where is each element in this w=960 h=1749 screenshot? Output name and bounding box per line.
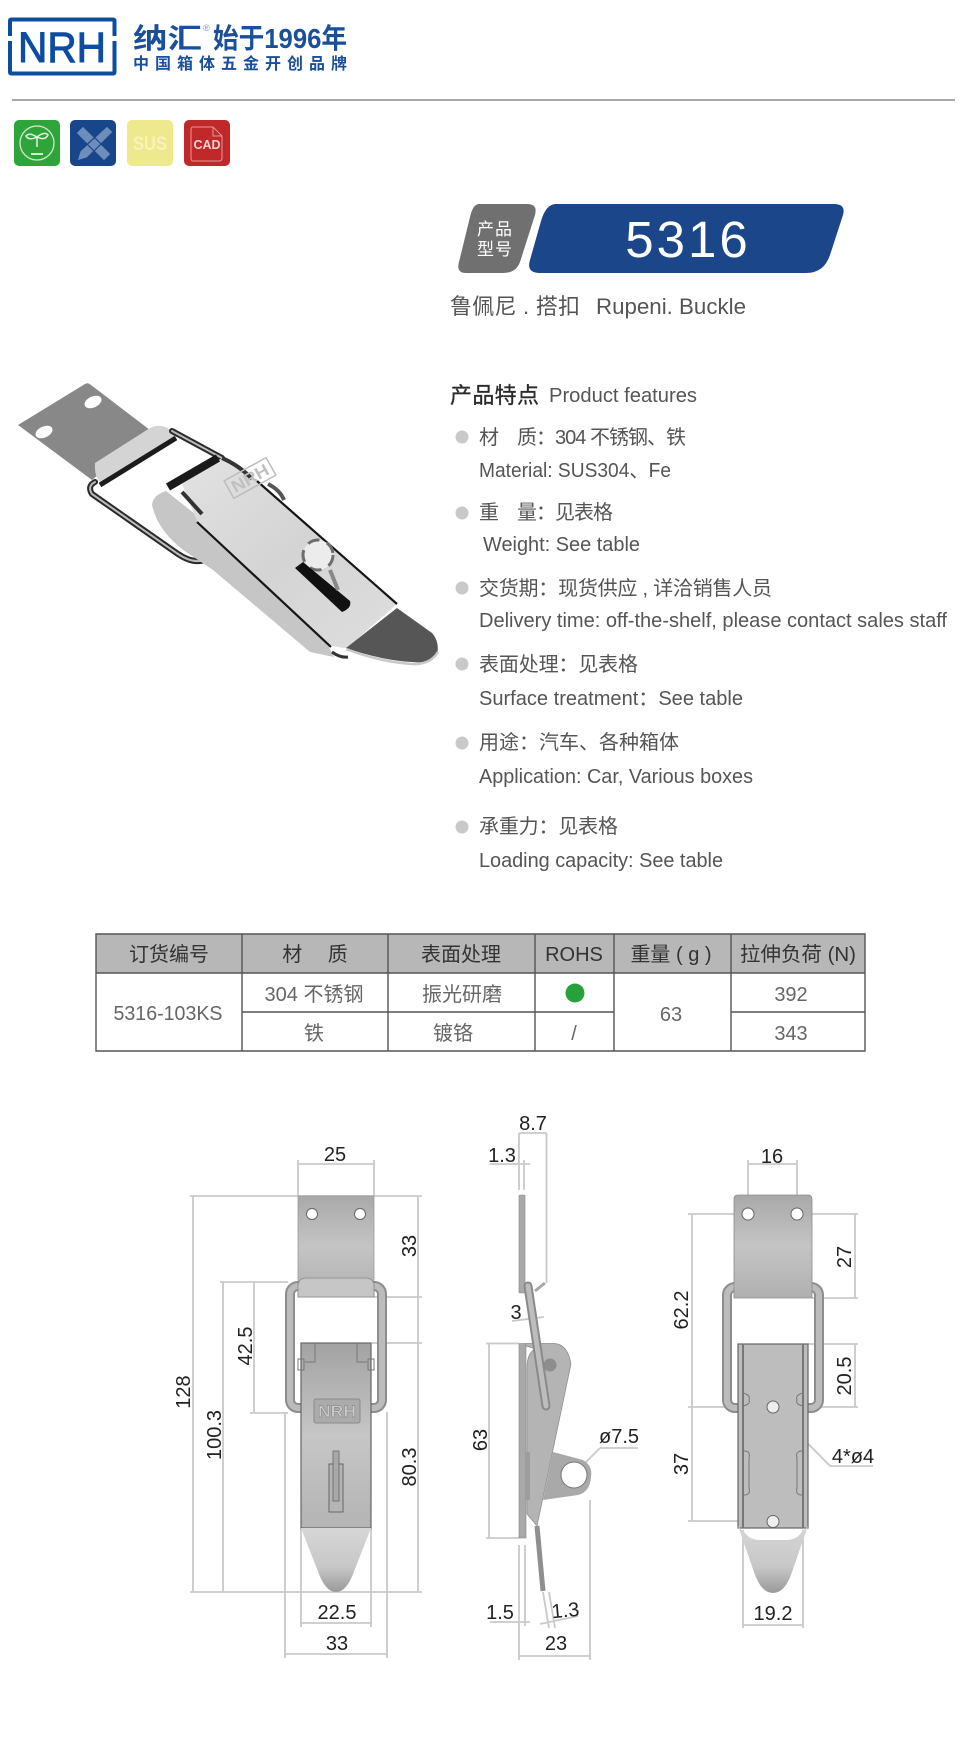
table header: 材 质 <box>282 943 348 966</box>
front view labels: 100.3 <box>204 1410 226 1460</box>
latch top face <box>182 458 397 648</box>
front view labels: 25 <box>324 1144 346 1166</box>
front view labels: 128 <box>173 1375 195 1409</box>
back view labels: 16 <box>761 1146 783 1168</box>
founded since 1996: 始于1996年 <box>213 23 347 54</box>
feature: surface: Surface treatment：See table <box>479 688 743 710</box>
table header: 表面处理 <box>421 943 501 966</box>
product name: 鲁佩尼 . 搭扣 <box>450 294 580 319</box>
label tab: 型号 <box>477 240 513 259</box>
front view labels: 42.5 <box>235 1327 257 1365</box>
icon: eco green <box>14 120 60 166</box>
hasp slot <box>329 1451 343 1512</box>
table body: / <box>571 1023 577 1045</box>
feature: surface <box>456 653 743 710</box>
nose <box>301 1528 371 1592</box>
back view labels: 19.2 <box>754 1603 792 1625</box>
brand slogan: 纳汇 <box>133 23 202 54</box>
back view labels: 20.5 <box>834 1357 856 1395</box>
side view labels: ø7.5 <box>599 1426 639 1448</box>
side view labels <box>470 1113 639 1655</box>
front view labels: 22.5 <box>318 1602 356 1624</box>
front view labels: 80.3 <box>399 1448 421 1486</box>
product photo: latch <box>18 383 438 664</box>
table body: 振光研磨 <box>422 983 502 1006</box>
back view labels: 4*ø4 <box>832 1446 874 1468</box>
brand subtitle: 中国箱体五金开创品牌 <box>133 54 347 73</box>
table header <box>96 934 865 973</box>
back plate <box>734 1195 812 1298</box>
feature: loading: Loading capacity: See table <box>479 850 723 872</box>
front view dimension lines <box>190 1160 422 1658</box>
embossed NRH badge: NRH <box>318 1402 356 1421</box>
side body <box>526 1344 571 1526</box>
table body: 304 不锈钢 <box>265 983 363 1006</box>
feature: weight <box>456 501 640 556</box>
side view labels: 1.3 <box>488 1145 516 1167</box>
certification icons <box>14 120 230 166</box>
slot and ring <box>295 540 350 612</box>
front view labels: 33 <box>326 1633 348 1655</box>
side nose <box>537 1526 543 1591</box>
latch side cylinder <box>152 491 334 657</box>
table header: ROHS <box>545 944 603 966</box>
feature: material: 材 质：304 不锈钢、铁 <box>479 426 686 449</box>
product name <box>450 294 746 319</box>
spec table <box>96 934 865 1051</box>
feature: surface: 表面处理：见表格 <box>479 653 638 676</box>
latch body <box>298 1343 374 1528</box>
drawing: back view <box>671 1146 874 1628</box>
feature: weight: 重 量：见表格 <box>479 501 613 524</box>
back view labels <box>671 1146 874 1625</box>
features heading: Product features <box>549 385 697 407</box>
wire loop <box>90 431 222 561</box>
table body: 63 <box>660 1004 682 1026</box>
feature: loading: 承重力：见表格 <box>479 815 618 838</box>
rolled band <box>298 1278 374 1297</box>
base strip <box>519 1344 526 1538</box>
logo: NRH box: NRH <box>18 24 106 72</box>
feature: application: 用途：汽车、各种箱体 <box>479 731 679 754</box>
table body: 镀铬 <box>433 1022 473 1045</box>
table body: 343 <box>774 1023 808 1045</box>
drawing: front view <box>173 1144 422 1658</box>
side view dimension lines <box>486 1133 638 1660</box>
product name: Rupeni. Buckle <box>596 294 746 319</box>
lug with hole <box>543 1452 591 1500</box>
feature: delivery <box>456 577 947 632</box>
wire loop <box>290 1286 382 1408</box>
feature: material: Material: SUS304、Fe <box>479 460 671 482</box>
icon: SUS <box>127 120 173 166</box>
nose tip <box>346 608 438 662</box>
back view dimension lines <box>688 1160 873 1628</box>
table grid <box>96 934 865 1051</box>
drawing: side view <box>470 1113 639 1660</box>
small tail <box>535 1283 545 1291</box>
feature: delivery: 交货期：现货供应 , 详洽销售人员 <box>479 577 772 600</box>
label tab: 产品 <box>477 220 513 239</box>
wire side <box>528 1286 546 1406</box>
features heading: 产品特点 <box>450 383 539 408</box>
embossed NRH badge <box>314 1399 360 1423</box>
base plate <box>18 383 150 480</box>
embossed NRH badge: NRH <box>228 460 272 496</box>
feature: application: Application: Car, Various boxes <box>479 766 753 788</box>
side view labels: 63 <box>470 1429 492 1451</box>
table body <box>114 983 808 1045</box>
icon: SUS: SUS <box>133 134 167 155</box>
features heading <box>450 383 697 408</box>
number bar: 5316 <box>625 211 751 268</box>
front view labels <box>173 1144 421 1655</box>
back latch body <box>738 1344 808 1528</box>
registered mark: ® <box>203 23 210 33</box>
back view labels: 27 <box>834 1246 856 1268</box>
table body: 392 <box>774 984 808 1006</box>
side view labels: 1.3 <box>551 1599 580 1623</box>
back view labels: 37 <box>671 1453 693 1475</box>
side view labels: 3 <box>510 1302 522 1324</box>
feature: application <box>456 731 753 788</box>
icon: ruler and pencil <box>70 120 116 166</box>
table header: 重量 ( g ) <box>630 943 712 966</box>
feature: loading <box>456 815 723 872</box>
ROHS compliant dot <box>566 984 584 1002</box>
table body: 铁 <box>304 1022 324 1045</box>
side view labels: 8.7 <box>519 1113 547 1135</box>
product features <box>450 383 947 872</box>
side view labels: 1.5 <box>486 1602 514 1624</box>
back wire loop <box>727 1287 819 1408</box>
front view labels: 33 <box>399 1235 421 1257</box>
icon: CAD: CAD <box>193 138 221 152</box>
brand logo header <box>10 20 347 74</box>
embossed NRH badge <box>224 458 276 498</box>
back view labels: 62.2 <box>671 1291 693 1329</box>
rolled band <box>95 426 176 484</box>
feature: delivery: Delivery time: off-the-shelf, please contact sales staff <box>479 610 947 632</box>
mounting plate <box>298 1196 374 1297</box>
feature: material <box>456 426 686 482</box>
table header: 拉伸负荷 (N) <box>740 943 856 966</box>
side view labels: 23 <box>545 1633 567 1655</box>
side plate <box>519 1195 525 1293</box>
back nose <box>738 1526 808 1593</box>
number bar <box>529 204 844 273</box>
model number badge <box>458 204 844 273</box>
icon: CAD <box>184 120 230 166</box>
feature: weight: Weight: See table <box>483 534 640 556</box>
label tab <box>458 204 536 273</box>
table header: 订货编号 <box>129 943 209 966</box>
table body: 5316-103KS <box>114 1003 222 1025</box>
